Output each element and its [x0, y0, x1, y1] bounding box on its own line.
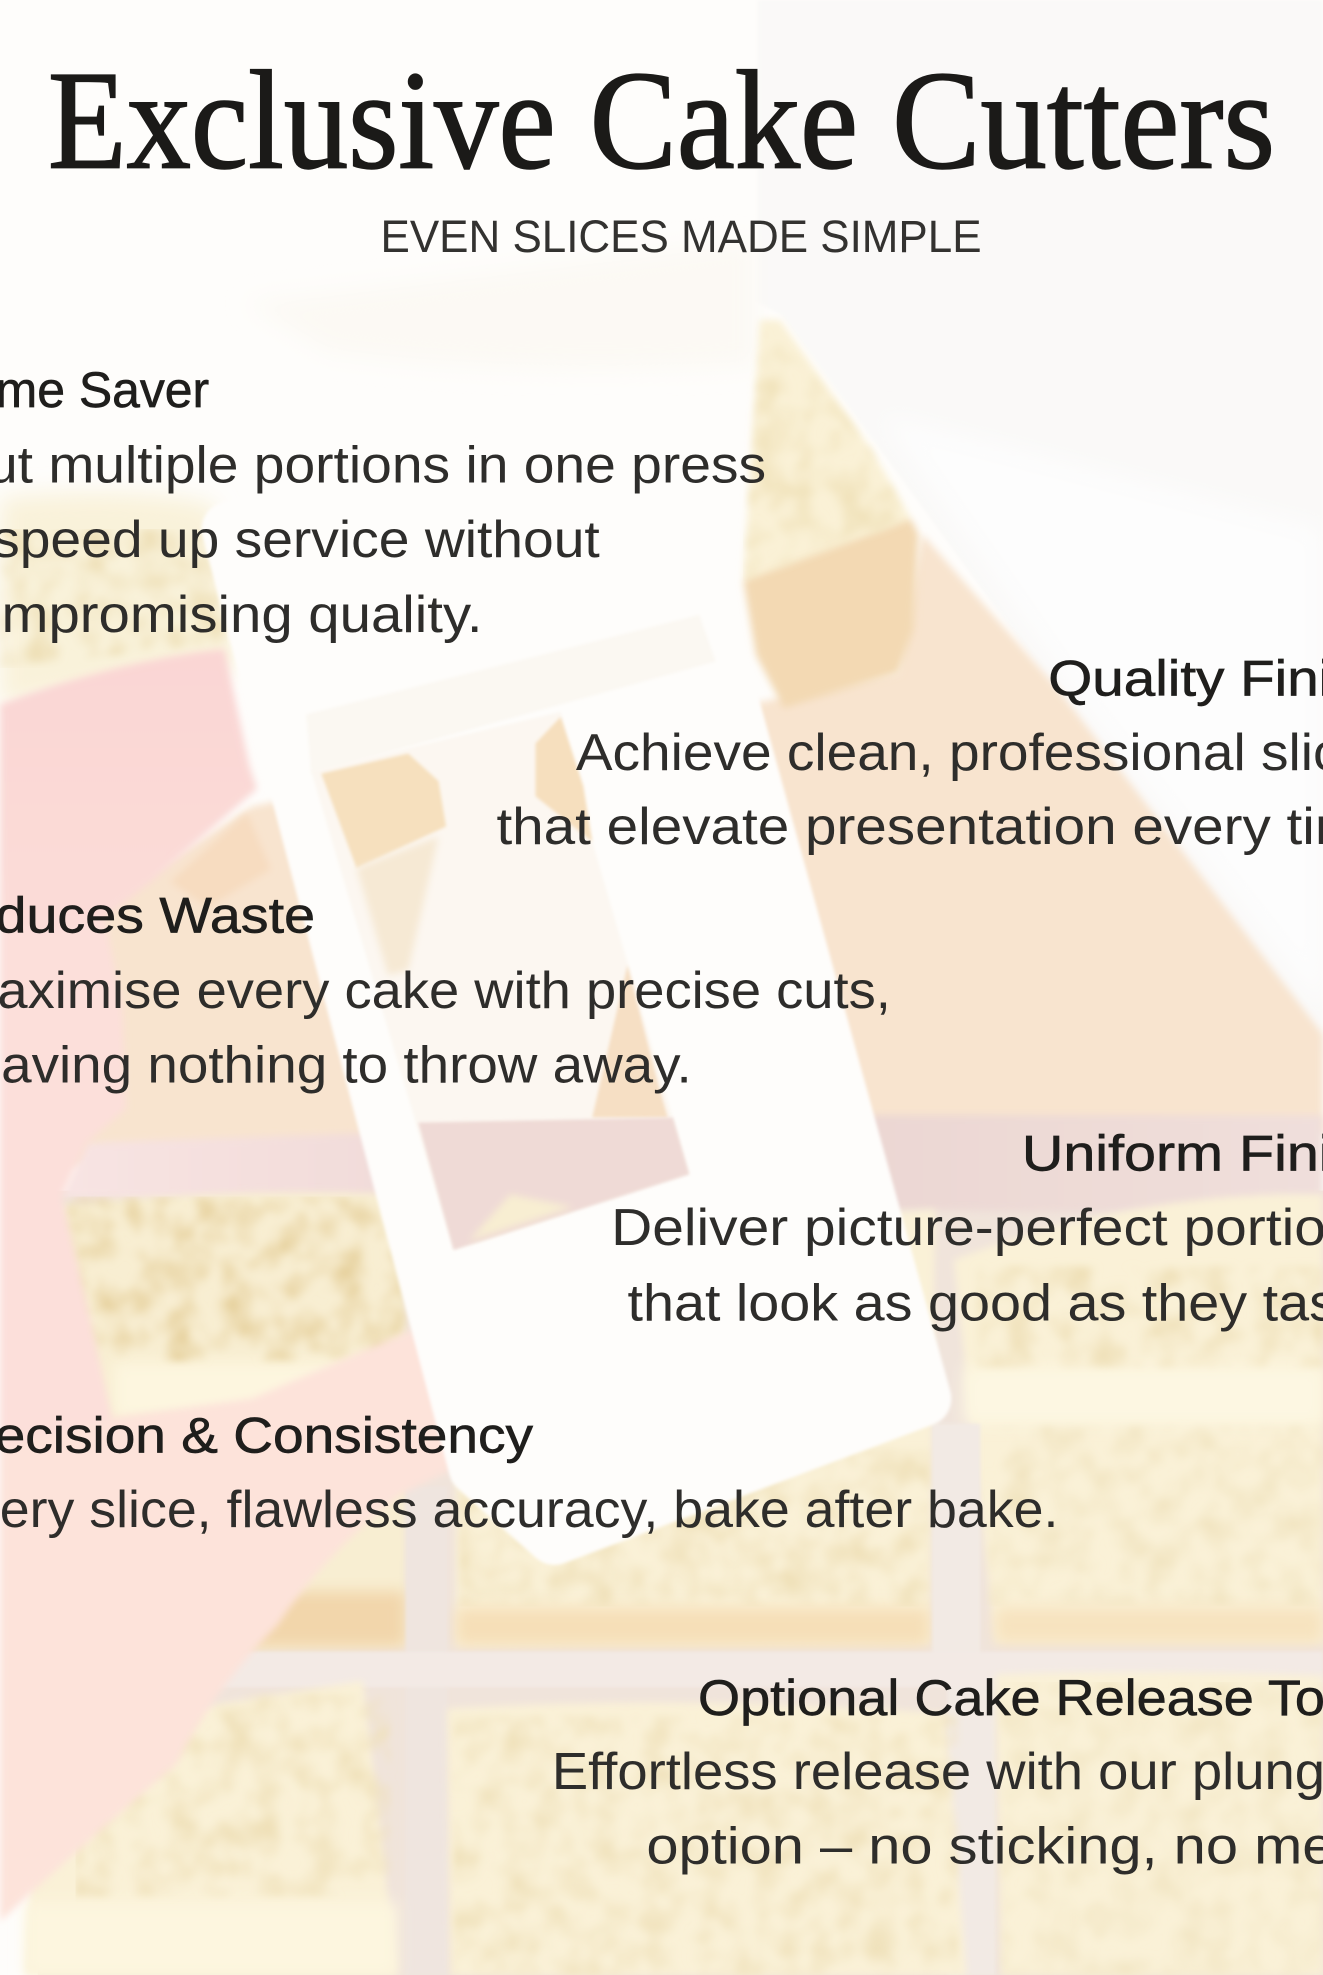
- cake cutter tool: [229, 418, 924, 1537]
- cake slice behind: [743, 320, 919, 708]
- cutter window: [311, 712, 689, 1250]
- bottom row crumbs: [76, 1682, 1323, 1975]
- bottom row cakes: [25, 1672, 1323, 1975]
- cutter crossbar: [306, 615, 716, 774]
- wood right of plunger: [592, 965, 668, 1118]
- pink pan rim: [62, 1115, 1323, 1216]
- index finger: [0, 649, 257, 932]
- top row crumbs: [59, 1197, 1323, 1606]
- crumb through rim: [469, 1194, 573, 1241]
- hand palm and lower fingers: [0, 882, 469, 1921]
- bottom cream band: [25, 1903, 397, 1975]
- cream band left: [113, 1362, 403, 1419]
- pale wall highlight: [882, 416, 1323, 1008]
- grey wall: [757, 0, 1323, 1058]
- title: [48, 42, 1275, 199]
- text block: uniform finish: that look as good as they taste: [627, 1273, 1323, 1331]
- pan rim through window: [418, 1118, 689, 1250]
- slice crumbs: [743, 328, 911, 581]
- cake layers: [113, 1362, 1323, 1647]
- text block: optional cake release tool: [552, 1669, 1323, 1874]
- top row cakes: [59, 1192, 1323, 1651]
- text block: optional cake release tool: option – no sticking, no mess: [646, 1816, 1323, 1874]
- title: Cutters: [892, 42, 1275, 199]
- body: Deliver picture-perfect portions: [611, 1198, 1323, 1256]
- finger shadow gap: [170, 813, 271, 907]
- text block: precision and consistency: [0, 1407, 1058, 1538]
- cake crumbs upper left: [0, 529, 227, 668]
- text block: quality finish: [496, 650, 1323, 855]
- baked edges: [456, 1608, 930, 1646]
- cutter body: [229, 418, 924, 1537]
- cake right of plunger: [536, 717, 592, 842]
- slice side: [743, 519, 919, 708]
- thumb: [0, 1320, 469, 1921]
- wooden board: [63, 534, 1323, 1165]
- window background: [311, 712, 689, 1250]
- pan tray: [38, 1191, 1323, 1975]
- box shadow detail: [246, 239, 756, 370]
- slice top: [743, 320, 911, 581]
- cake through window: [321, 753, 446, 868]
- title: Cake: [590, 42, 858, 199]
- cream band right: [964, 1367, 1323, 1424]
- text block: uniform finish: [611, 1125, 1323, 1331]
- cake at upper left: [0, 493, 239, 706]
- text block: reduces waste: [0, 886, 891, 1093]
- text block: time saver: [0, 361, 766, 643]
- body: Effortless release with our plunger: [552, 1742, 1323, 1800]
- subtitle: EVEN SLICES MADE SIMPLE: [381, 211, 982, 262]
- hand: [0, 649, 469, 1921]
- text block: quality finish: that elevate presentation every time: [496, 797, 1323, 855]
- title: Exclusive: [48, 42, 556, 199]
- pan dividers: [202, 1424, 1323, 1975]
- crumb through window: [357, 837, 438, 975]
- heading: Optional Cake Release Tool: [698, 1669, 1323, 1726]
